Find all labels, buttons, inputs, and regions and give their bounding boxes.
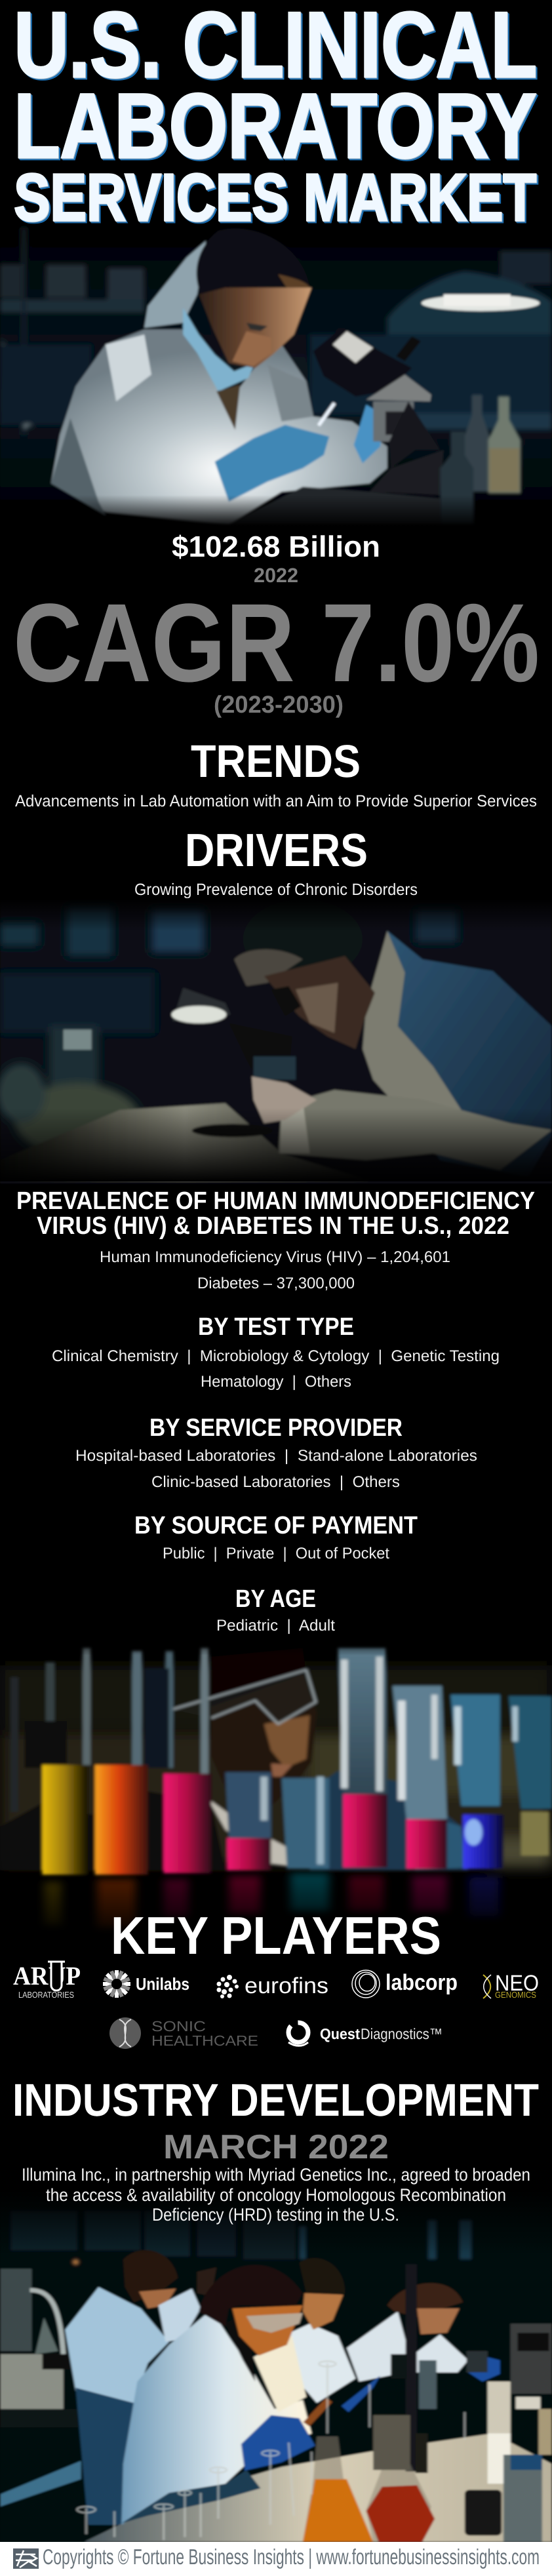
heading: BY AGE — [235, 1585, 316, 1613]
photo 3 bottom fade — [0, 1875, 552, 1941]
bottles — [440, 395, 521, 525]
HIV figure: Human Immunodeficiency Virus (HIV) – 1,204,601 — [100, 1248, 450, 1266]
shoulder — [292, 1771, 468, 1871]
market size value: $102.68 Billion — [172, 530, 380, 563]
development description — [22, 2165, 530, 2225]
logo: NeoGenomics — [483, 1971, 539, 2000]
dark cylinder — [465, 2490, 502, 2535]
logo: Unilabs — [103, 1970, 189, 1998]
photo 2 bottom fade — [0, 1108, 552, 1181]
bench — [0, 1103, 370, 1181]
goggles — [172, 1670, 316, 1724]
main scientist coat — [121, 2310, 311, 2525]
photo: lab team — [0, 2190, 552, 2543]
logo: labcorp: labcorp — [385, 1970, 458, 1995]
photo 3 top fade — [0, 1636, 552, 1655]
logo: Quest Diagnostics — [288, 2023, 443, 2046]
inner coat — [363, 931, 461, 1126]
pole — [406, 2264, 417, 2472]
hair — [211, 1648, 306, 1715]
reflections — [44, 1882, 62, 1926]
logo: eurofins: eurofins — [245, 1973, 328, 1998]
microscope — [313, 328, 412, 397]
hair — [199, 2265, 303, 2327]
logo: ARUP: LABORATORIES — [18, 1990, 74, 2000]
items: Pediatric | Adult — [216, 1617, 335, 1635]
mask — [183, 307, 255, 391]
flask red — [366, 2427, 431, 2542]
photo: scientist with microscope — [0, 224, 552, 525]
logo: Sonic Healthcare: SONIC — [151, 2018, 206, 2034]
footer logo — [13, 2548, 39, 2569]
tube highlights — [341, 1659, 348, 1789]
logo: ARUP: ARUP — [13, 1961, 81, 1991]
left equipment — [0, 2269, 31, 2351]
logo: NeoGenomics: NEO — [495, 1971, 539, 1996]
items line 2: Hematology | Others — [201, 1373, 351, 1391]
photo 2 top fade — [0, 898, 552, 931]
desk paper — [229, 486, 440, 525]
segment: by source of payment — [134, 1512, 418, 1562]
thin streaks — [46, 1663, 54, 1765]
table — [85, 2434, 552, 2542]
items line 1: Hospital-based Laboratories | Stand-alone Laboratories — [75, 1447, 477, 1465]
line 2: the access & availability of oncology Homologous Recombination — [46, 2185, 506, 2205]
logo: Quest Diagnostics: Quest — [320, 2025, 360, 2042]
face — [232, 2305, 303, 2356]
coat — [51, 330, 387, 525]
dark arm left — [0, 1791, 226, 1871]
photo 4 top cover — [0, 2164, 552, 2190]
fourth person — [347, 2312, 468, 2381]
face — [264, 956, 375, 1049]
photo 4 top fade — [0, 2190, 552, 2255]
base year: 2022 — [254, 564, 298, 587]
hair — [197, 229, 310, 301]
logo: Unilabs: Unilabs — [136, 1974, 189, 1994]
drivers text: Growing Prevalence of Chronic Disorders — [134, 881, 418, 899]
logo: Quest Diagnostics: Diagnostics™ — [361, 2025, 443, 2042]
flask orange — [303, 2436, 373, 2542]
items line 2: Clinic-based Laboratories | Others — [151, 1473, 400, 1491]
heading: BY TEST TYPE — [198, 1313, 354, 1341]
forecast period: (2023-2030) — [214, 691, 344, 718]
sleeve — [278, 1090, 552, 1170]
glove — [215, 425, 329, 502]
liquids — [42, 1765, 88, 1874]
stage base — [192, 1124, 273, 1138]
sweater — [216, 385, 240, 430]
upper tubes — [338, 1648, 387, 1794]
glove — [208, 1798, 311, 1869]
face — [211, 1674, 317, 1806]
face — [199, 288, 311, 368]
photo 3 top cover — [0, 1600, 552, 1636]
photo: man at microscope — [0, 899, 552, 1183]
photo 1 bottom fade — [0, 495, 552, 528]
heading: key players: KEY PLAYERS — [111, 1907, 441, 1966]
glove — [241, 2415, 315, 2470]
line 3: Deficiency (HRD) testing in the U.S. — [152, 2205, 399, 2225]
white cylinder — [488, 2381, 511, 2482]
prevalence heading line 2: VIRUS (HIV) & DIABETES IN THE U.S., 2022 — [37, 1212, 509, 1240]
right instrument — [511, 2324, 552, 2394]
footer — [0, 2542, 552, 2576]
dark bottle tops — [25, 1721, 67, 1768]
development date: MARCH 2022 — [163, 2128, 389, 2166]
second back person — [159, 2289, 201, 2342]
items: Public | Private | Out of Pocket — [163, 1545, 389, 1562]
segment: by service provider — [75, 1414, 477, 1491]
heading: BY SERVICE PROVIDER — [149, 1414, 403, 1442]
prevalence section — [16, 1187, 535, 1292]
trends text: Advancements in Lab Automation with an Aim to Provide Superior Services — [15, 792, 537, 810]
third person — [277, 2324, 355, 2403]
logo: Sonic Healthcare — [109, 2017, 258, 2049]
logo: NeoGenomics: GENOMICS — [495, 1990, 536, 2000]
title — [14, 0, 537, 235]
jacket — [380, 931, 552, 1177]
left woman — [65, 2287, 169, 2421]
hood — [144, 241, 206, 328]
photo: test tubes with scientist — [0, 1648, 552, 1929]
logo: labcorp — [352, 1970, 458, 1998]
heading: drivers: DRIVERS — [185, 825, 368, 877]
segment: by test type — [52, 1313, 500, 1391]
glassware outlines — [77, 2361, 465, 2540]
logo: Sonic Healthcare: HEALTHCARE — [151, 2032, 258, 2049]
items line 1: Clinical Chemistry | Microbiology & Cytology | Genetic Testing — [52, 1347, 500, 1365]
heading: BY SOURCE OF PAYMENT — [134, 1512, 418, 1539]
diabetes figure: Diabetes – 37,300,000 — [197, 1275, 355, 1292]
segment: by age — [216, 1585, 335, 1635]
hair — [243, 899, 363, 980]
microscope — [183, 959, 285, 1020]
heading: trends: TRENDS — [191, 736, 361, 787]
hands — [252, 1077, 317, 1123]
